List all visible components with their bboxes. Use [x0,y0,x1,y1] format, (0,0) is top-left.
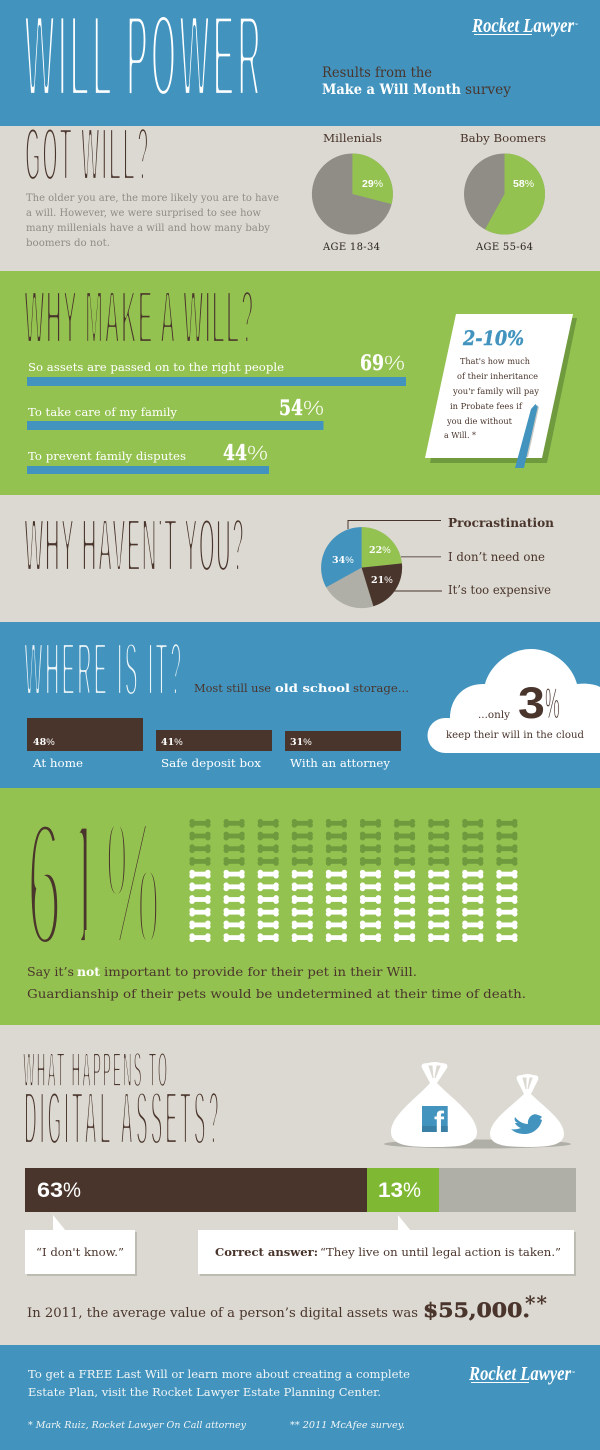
stat: 61%: 61 [26,778,102,989]
text: old school storage [194,681,409,695]
legend: procrastination: Procrastination [448,516,554,530]
text: footnotes: * Mark Ruiz, Rocket Lawyer On Call attorney [28,1420,247,1431]
bar: my family 54% [27,395,324,430]
chart: stacked bar: 63 [37,1179,63,1202]
icon: pen [515,404,539,468]
bar: my family 54%: % [303,397,324,420]
logo: Rocket Lawyer: ™ [574,22,578,27]
bar: with an attorney 31% [285,731,401,770]
bar: safe deposit box 41%: Safe deposit box [161,756,262,770]
callout: paper with probate fees [425,314,577,468]
callout: paper with probate fees: in Probate fees if [450,402,523,412]
subtitle [322,65,511,98]
pie chart: reasons: 21% [371,575,393,586]
heading: why make a will: WHY MAKE A WILL? [24,274,254,362]
bar: at home 48% [27,718,143,770]
callout: paper with probate fees: you die without [446,417,513,427]
panel: pets [0,778,600,1025]
bar: right people 69% [27,350,406,386]
bar: right people 69%: So assets are passed on to the right people [28,360,284,374]
chart: stacked bar: % [63,1179,81,1202]
text: pets statement: Say it’s [27,964,74,979]
callout: cloud 3%: % [545,678,560,727]
pie chart: millenials: AGE 18-34 [322,242,380,253]
text: digital asset value: ** [525,1291,548,1315]
panel: footer [0,1345,600,1450]
subtitle: Make a Will Month [322,82,461,98]
legend: too expensive: It’s too expensive [448,583,551,597]
text: digital asset value [27,1291,548,1322]
callout: paper with probate fees: you'r family will pay [452,387,539,397]
callout: cloud 3%: ...only [478,709,510,721]
callout: correct answer [198,1215,576,1276]
heading: what happens to digital assets: DIGITAL ASSETS? [24,1075,219,1163]
pie chart: baby boomers: AGE 55-64 [475,242,533,253]
bar: with an attorney 31%: With an attorney [290,756,390,770]
text: got will description: many millenials have a will and how many baby [26,222,270,234]
panel: got will [0,110,600,271]
subtitle: Results from the [322,65,432,81]
bar: right people 69%: 69 [360,350,384,375]
bar: family disputes 44%: To prevent family disputes [28,449,186,463]
bar: family disputes 44% [27,440,269,474]
text: digital asset value: $55,000. [423,1298,530,1322]
heading: why haven't you: WHY HAVEN’T YOU? [24,501,245,590]
pie chart: millenials [312,131,393,253]
text: old school storage: old school [275,681,351,695]
text: pets statement: Guardianship of their pets would be undetermined at their time of death. [27,986,526,1001]
panel: where is it [0,622,600,788]
pie chart: reasons: 34% [332,555,354,566]
pie chart: reasons: 22% [369,545,391,556]
text: pets statement: not [77,964,100,979]
legend: procrastination [348,516,554,530]
text: old school storage: Most still use [194,681,271,695]
bar: family disputes 44%: 44 [223,440,247,465]
icon: money bags [384,1062,571,1148]
text: pets statement [27,964,526,1001]
subtitle: survey [465,82,511,98]
pictogram: bones [189,819,518,942]
text: digital asset value: In 2011, the average value of a person’s digital assets was [27,1306,418,1321]
pie chart: baby boomers: 58% [513,178,534,190]
bar: with an attorney 31%: 31% [290,737,312,748]
logo: Rocket Lawyer footer: Rocket Lawyer [468,1363,571,1385]
bar: my family 54%: 54 [279,395,303,420]
legend: don't need one: I don’t need one [448,550,545,564]
chart: stacked bar [25,1168,576,1212]
pie chart: baby boomers: Baby Boomers [460,131,546,145]
chart: stacked bar: % [403,1179,421,1202]
callout: paper with probate fees: of their inheritance [457,372,538,382]
pie chart: millenials: Millenials [323,131,382,145]
callout: cloud 3%: keep their will in the cloud [446,729,584,741]
bar: my family 54%: To take care of my family [28,405,177,419]
stat: 61% [26,778,160,989]
text: got will description [26,192,279,249]
text: call to action: Estate Plan, visit the Rocket Lawyer Estate Planning Center. [28,1385,381,1399]
text: call to action [28,1367,410,1399]
bar: safe deposit box 41%: 41% [161,737,183,748]
chart: stacked bar: 13 [378,1179,403,1202]
bar: right people 69%: % [384,352,405,375]
bar: at home 48%: At home [32,756,83,770]
text: old school storage: storage... [353,681,409,695]
text: call to action: To get a FREE Last Will or learn more about creating a complete [28,1367,410,1381]
callout: paper with probate fees: a Will. * [444,431,477,441]
pie chart: baby boomers [460,131,546,253]
bar: at home 48%: 48% [33,737,55,748]
stat: 61%: % [105,782,160,984]
text: got will description: boomers do not. [26,237,110,249]
icon: facebook bag: f [434,1106,445,1139]
callout: correct answer: Correct answer: [215,1245,318,1259]
callout: I don't know [25,1215,137,1276]
heading: got will: GOT WILL? [25,110,149,199]
text: footnotes: ** 2011 McAfee survey. [290,1420,405,1431]
text: got will description: The older you are, the more likely you are to have [26,192,279,204]
callout: correct answer: “They live on until legal action is taken.” [320,1245,561,1259]
text: got will description: a will. However, we were surprised to see how [26,207,261,219]
callout: paper with probate fees: 2-10% [462,326,524,350]
pie chart: reasons [321,527,402,608]
text: pets statement: important to provide for their pet in their Will. [104,964,417,979]
callout: cloud 3%: 3 [518,678,545,728]
icon: facebook bag [391,1062,477,1147]
heading: what happens to digital assets: WHAT HAPPENS TO [23,1042,167,1100]
logo: Rocket Lawyer: Rocket Lawyer [471,15,574,37]
callout: paper with probate fees: That's how much [460,357,530,367]
bar: family disputes 44%: % [247,442,268,465]
panel: why haven't you [0,495,600,622]
logo: Rocket Lawyer footer: ™ [571,1370,575,1375]
icon: twitter bag [490,1074,564,1147]
panel: why make a will [0,271,600,495]
pie chart: millenials: 29% [362,178,383,190]
heading: where is it: WHERE IS IT? [24,625,182,714]
callout: cloud 3% [428,649,600,753]
bar: safe deposit box 41% [156,730,272,770]
panel: header [0,0,600,126]
callout: I don't know: “I don't know.” [36,1245,124,1259]
text: footnotes [28,1420,405,1431]
panel: digital assets [0,1025,600,1345]
